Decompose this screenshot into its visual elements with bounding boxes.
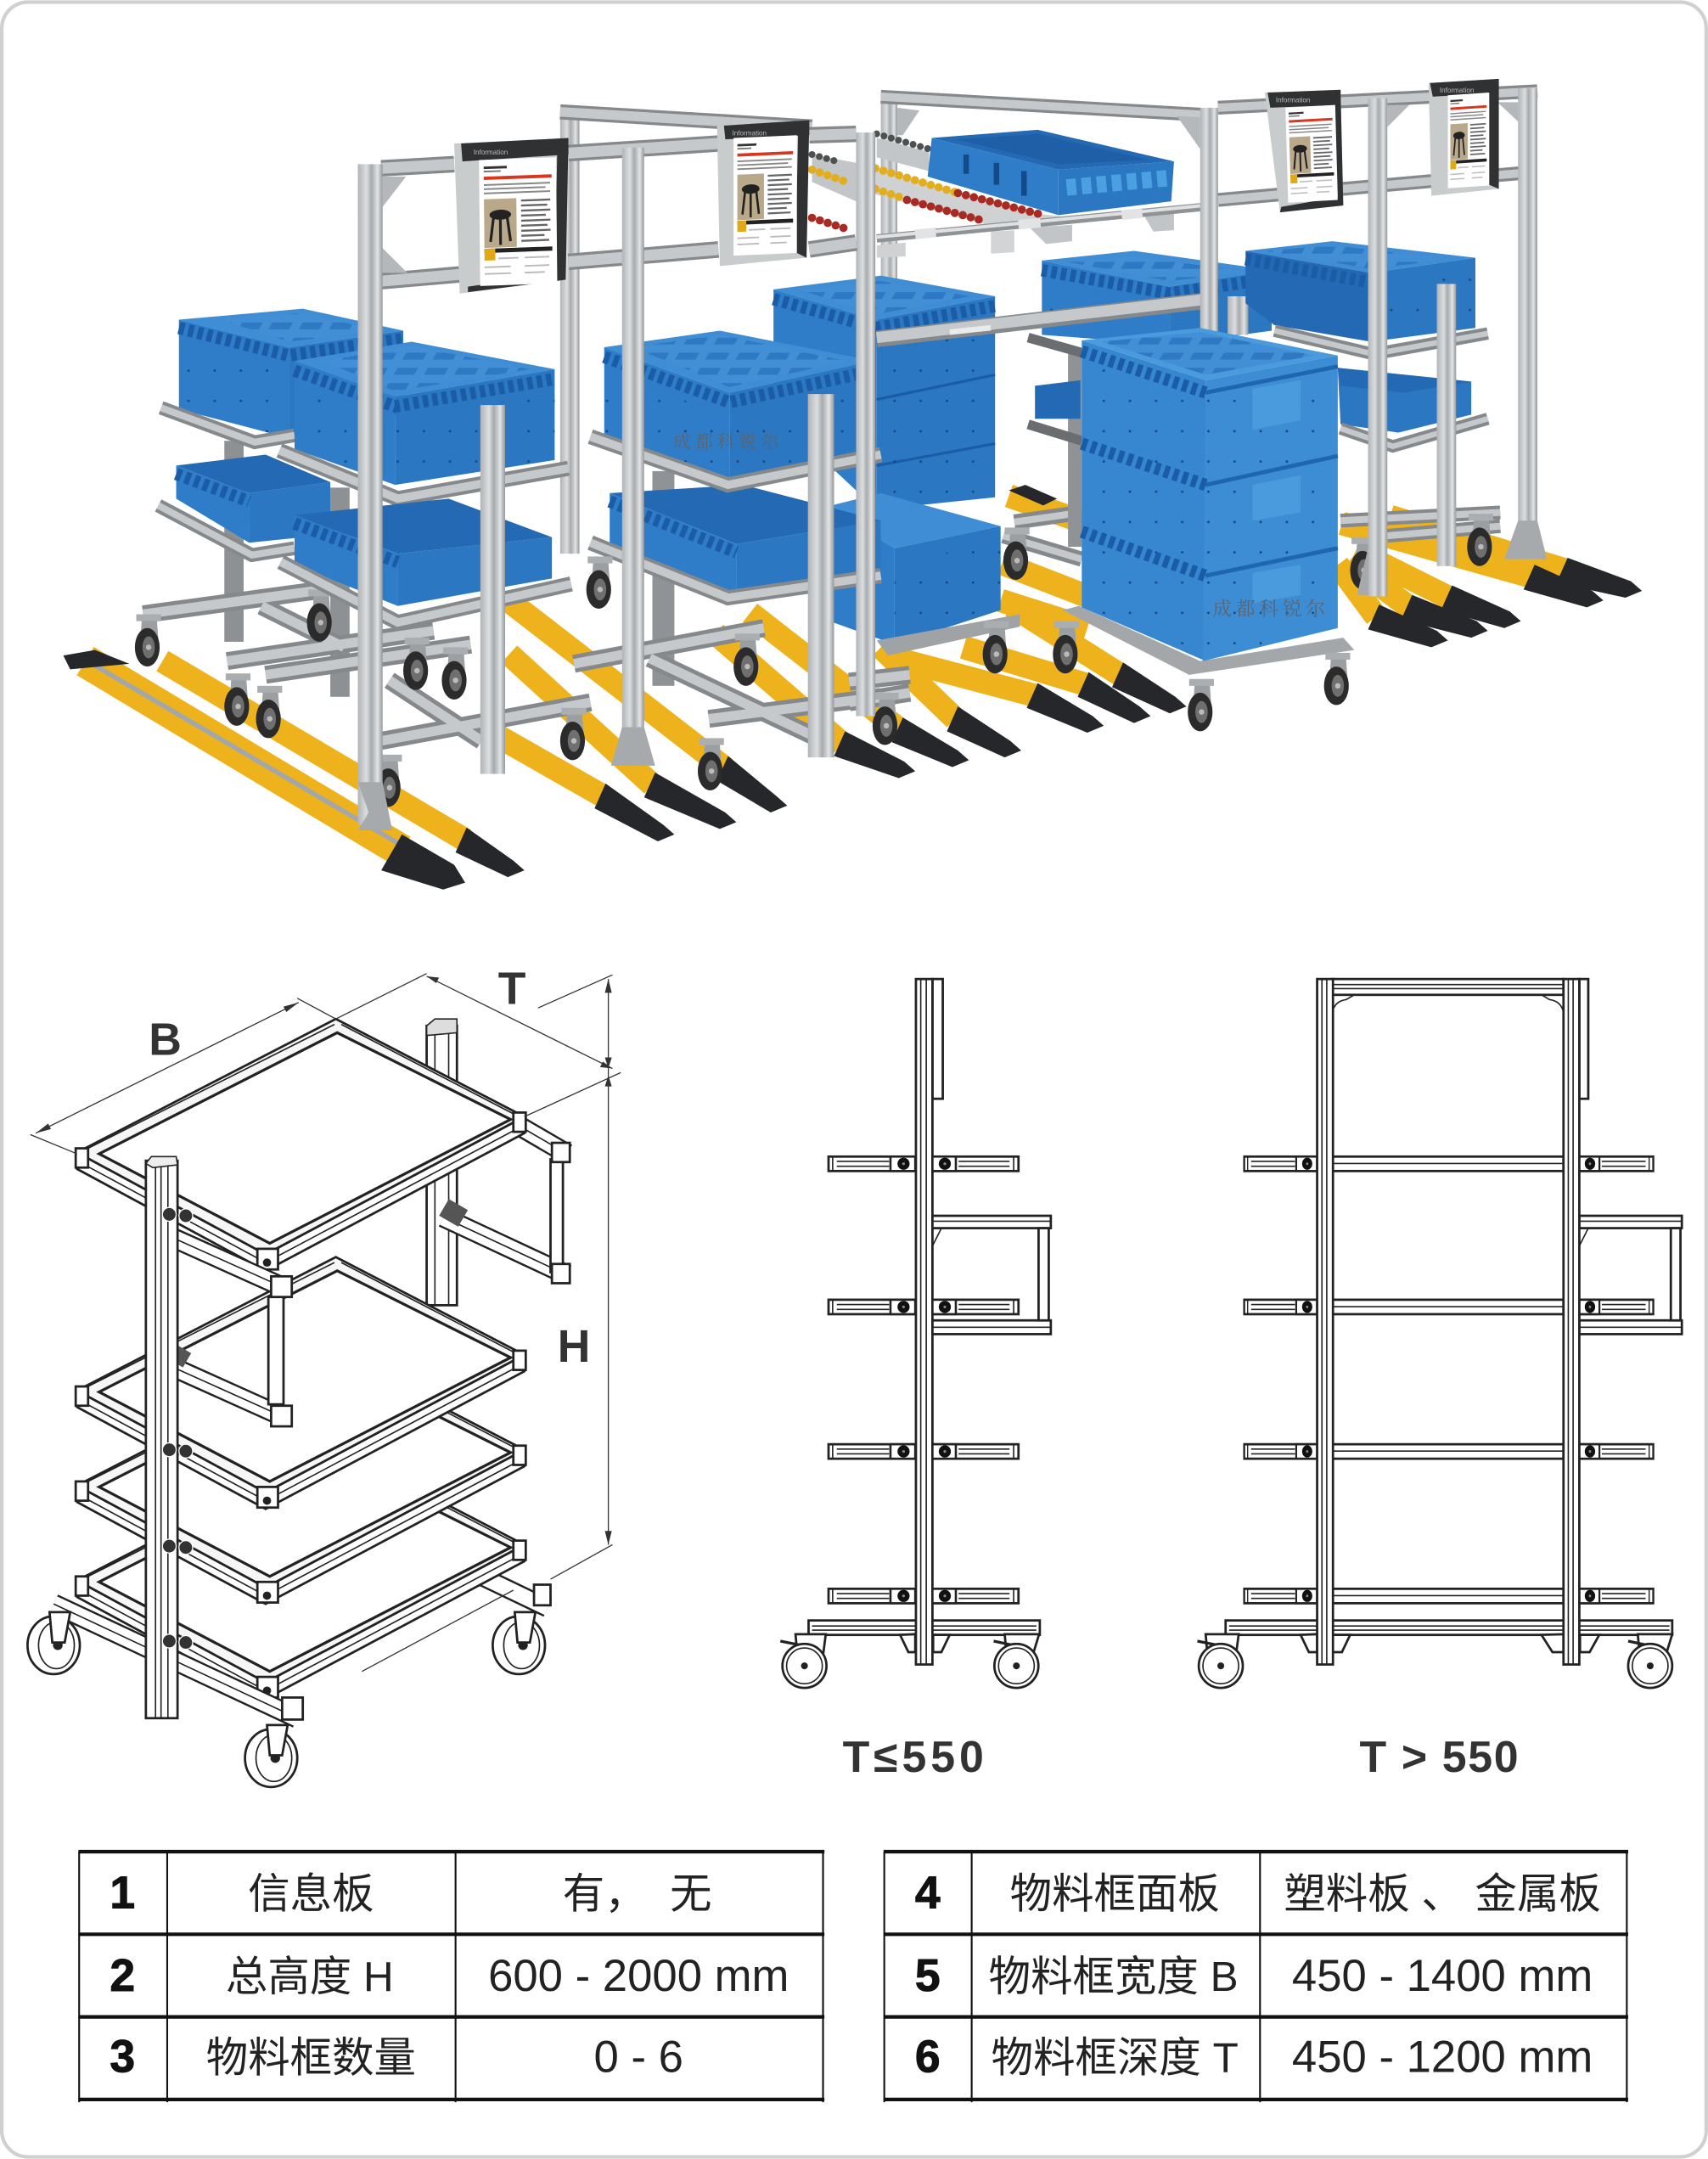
side view: T ≤ 550	[780, 979, 1051, 1688]
info panel 4: Information	[1440, 87, 1474, 94]
rear base	[481, 1577, 551, 1608]
watermark left: 成都科锐尔	[673, 431, 783, 452]
black rail tips	[64, 485, 1642, 890]
right back shelves	[1274, 331, 1488, 447]
shelf 3	[76, 1352, 525, 1604]
yellow floor rails	[64, 485, 1642, 890]
row 1: 1	[110, 1869, 135, 1919]
back-centre cart bars and shelves	[1003, 338, 1082, 559]
photo: flow rack system	[64, 79, 1642, 890]
base and wheels	[780, 1621, 1040, 1688]
info panel 2	[717, 120, 809, 266]
info panel 3	[1265, 90, 1343, 212]
row 3: 3	[110, 2032, 135, 2082]
upright behind big stack	[1200, 108, 1218, 335]
table grid	[78, 1852, 824, 2102]
top beam	[1332, 979, 1564, 1012]
crate: front left lower tray	[295, 498, 552, 606]
watermark right: 成都科锐尔	[1212, 599, 1329, 620]
cross bars	[1244, 1156, 1654, 1603]
row 6: 物料框深度 T	[992, 2034, 1239, 2081]
caption T > 550: T > 550	[1359, 1732, 1520, 1781]
shelf: front left upper	[279, 451, 569, 498]
row 5: 5	[915, 1951, 941, 2001]
crate: lower centre on cart	[826, 493, 1020, 655]
label B: B	[149, 1015, 182, 1065]
post: centre short	[808, 394, 834, 757]
row 1	[110, 1869, 712, 1919]
rear frame and roller conveyor	[812, 91, 1205, 352]
base and wheels	[1198, 1621, 1672, 1688]
handle	[932, 1216, 1051, 1334]
row 1: 有， 无	[563, 1871, 712, 1918]
caption T ≤ 550: T≤550	[843, 1732, 988, 1781]
row 4: 4	[915, 1869, 941, 1919]
front handle	[164, 1234, 292, 1426]
uprights and rails of left frames	[358, 132, 875, 830]
table grid	[884, 1852, 1628, 2102]
handle	[1579, 1216, 1682, 1334]
shelf 1	[76, 1019, 525, 1271]
side view: T > 550	[1198, 979, 1682, 1688]
row 1: 信息板	[248, 1871, 374, 1918]
spec table left	[78, 1852, 824, 2102]
right frame uprights	[1218, 88, 1547, 596]
rear upright	[427, 1019, 457, 1305]
uprights	[1318, 979, 1579, 1665]
rear handle	[439, 1125, 570, 1283]
row 4: 物料框面板	[1010, 1871, 1220, 1918]
shelf: front left lower	[281, 562, 571, 622]
centre cart stem and crates	[591, 331, 881, 686]
top crate on rollers	[928, 130, 1174, 215]
row 3	[110, 2032, 683, 2082]
shelf bars	[829, 1156, 1019, 1603]
crate stack behind centre	[773, 276, 995, 509]
info panel 3: Information	[1276, 96, 1310, 104]
rear wheel	[492, 1612, 545, 1674]
front base rails	[53, 1604, 303, 1719]
crate: front left upper	[295, 341, 554, 485]
post: front left short	[480, 405, 505, 774]
row 2: 600 - 2000 mm	[488, 1951, 789, 2001]
shelf 4	[76, 1447, 525, 1699]
label T: T	[498, 964, 526, 1014]
left cart bars and wheels	[135, 589, 591, 807]
row 2: 总高度 H	[226, 1954, 394, 2000]
row 5: 物料框宽度 B	[989, 1954, 1239, 2000]
row 6: 450 - 1200 mm	[1292, 2032, 1593, 2082]
upright and info panel	[916, 979, 943, 1665]
rear left upright	[560, 110, 580, 554]
row 4: 塑料板 、 金属板	[1284, 1871, 1601, 1918]
crate: back centre shelf	[1042, 250, 1272, 345]
label H: H	[558, 1322, 590, 1372]
top rear rail left	[560, 112, 812, 127]
connector knobs	[162, 1207, 193, 1650]
info panel 1: Information	[474, 149, 508, 156]
info panel 1	[454, 138, 569, 294]
spec table right	[884, 1852, 1628, 2102]
right cart frame	[1340, 513, 1500, 589]
row 3: 0 - 6	[594, 2032, 683, 2082]
row 2	[110, 1951, 789, 2001]
info panel 4	[1429, 79, 1499, 196]
right back crates	[1245, 241, 1475, 433]
centre cart bars and wheels	[574, 556, 910, 790]
left back crates and shelves	[158, 309, 403, 697]
info panel edge	[1579, 979, 1588, 1099]
dimension lines	[31, 974, 621, 1672]
row 4	[915, 1869, 1601, 1919]
shelf 2	[76, 1257, 525, 1509]
front upright	[146, 1156, 177, 1718]
info panel 2: Information	[733, 129, 767, 137]
isometric cart drawing	[27, 964, 621, 1787]
big crate stack on cart	[983, 328, 1354, 731]
front wheels	[27, 1612, 80, 1674]
row 6	[915, 2032, 1593, 2082]
short post	[1228, 296, 1248, 335]
long front beam	[877, 299, 1208, 339]
row 2: 2	[110, 1951, 135, 2001]
row 6: 6	[915, 2032, 941, 2082]
row 5: 450 - 1400 mm	[1292, 1951, 1593, 2001]
row 5	[915, 1951, 1593, 2001]
row 3: 物料框数量	[206, 2034, 416, 2081]
